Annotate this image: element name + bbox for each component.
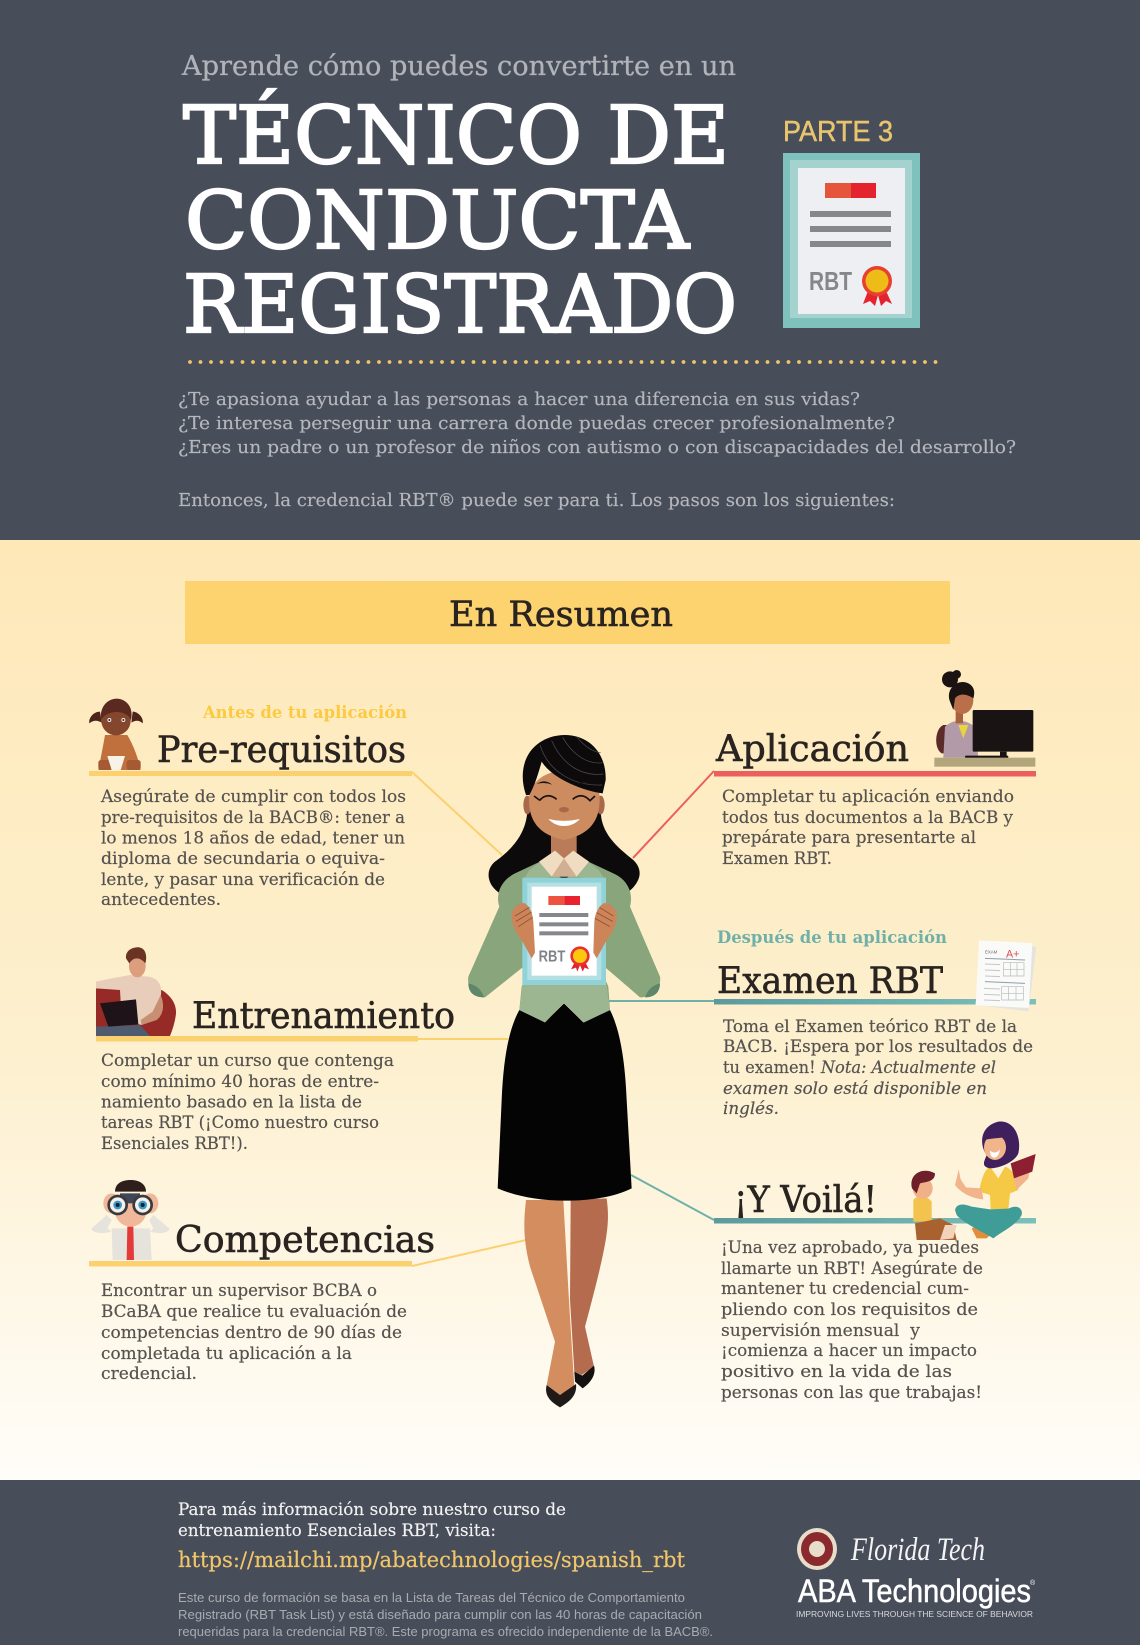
body text: inglés.	[723, 1099, 779, 1119]
body text: tu examen! Nota: Actualmente el	[723, 1058, 996, 1078]
body text: Toma el Examen teórico RBT de la	[723, 1017, 1017, 1037]
icon: baby	[89, 699, 143, 770]
heading: en resumen: En Resumen	[449, 595, 673, 635]
body text: Examen RBT.	[722, 849, 832, 869]
label: parte 3: PARTE 3	[783, 116, 893, 148]
title: CONDUCTA	[185, 174, 690, 267]
body text: examen solo está disponible en	[723, 1079, 987, 1099]
intro questions: ¿Te interesa perseguir una carrera donde puedas crecer profesionalmente?	[178, 413, 895, 434]
title: TÉCNICO DE	[183, 88, 729, 182]
title	[183, 88, 737, 351]
body text	[722, 787, 1014, 869]
cuffs	[468, 983, 484, 997]
legs	[524, 1200, 574, 1395]
icon: RBT certificate: RBT	[809, 266, 852, 296]
body text: namiento basado en la lista de	[101, 1092, 362, 1112]
body text: mantener tu credencial cum-	[721, 1279, 969, 1299]
intro line: Aprende cómo puedes convertirte en un	[181, 51, 736, 82]
panel: header	[0, 0, 1140, 540]
body text: supervisión mensual y	[721, 1321, 920, 1341]
hair back	[489, 810, 640, 893]
face	[523, 796, 531, 814]
body text: lo menos 18 años de edad, tener un	[101, 828, 405, 848]
call to action: Para más información sobre nuestro curso de	[178, 1500, 566, 1520]
skirt	[498, 1003, 632, 1201]
body text	[101, 1281, 407, 1384]
icon: exam papers	[976, 940, 1036, 1011]
body text: diploma de secundaria o equiva-	[101, 849, 385, 869]
sublabel: Antes de tu aplicación	[202, 703, 407, 723]
body text	[101, 1051, 394, 1154]
body text: pre-requisitos de la BACB®: tener a	[101, 808, 405, 828]
sublabel: Después de tu aplicación	[717, 928, 947, 948]
logo: aba technologies: ABA Technologies	[798, 1573, 1031, 1609]
body text: completada tu aplicación a la	[101, 1344, 352, 1364]
panel: footer	[0, 1480, 1140, 1645]
body text: ¡comienza a hacer un impacto	[721, 1341, 977, 1361]
illustration: woman holding certificate: RBT	[539, 949, 566, 966]
jacket	[468, 862, 660, 1022]
panel: summary background	[0, 540, 1140, 1480]
illustration: woman holding certificate	[468, 735, 660, 1407]
body text: competencias dentro de 90 días de	[101, 1323, 402, 1343]
connector lines	[412, 771, 714, 1266]
body text	[721, 1238, 983, 1403]
rule	[89, 1261, 412, 1266]
logo: aba technologies: ®	[1030, 1579, 1036, 1587]
body text: BACB. ¡Espera por los resultados de	[723, 1037, 1033, 1057]
facial features	[537, 781, 592, 785]
body text	[100, 787, 406, 910]
panel: pre-requisitos	[89, 699, 412, 910]
hair top	[523, 735, 606, 795]
body text: antecedentes.	[101, 890, 221, 910]
disclaimer: Registrado (RBT Task List) y está diseñado para cumplir con las 40 horas de capacitación	[178, 1608, 702, 1622]
boy	[913, 1196, 932, 1222]
body text: pliendo con los requisitos de	[721, 1300, 978, 1320]
intro questions: ¿Eres un padre o un profesor de niños con autismo o con discapacidades del desarrollo?	[178, 437, 1016, 458]
rule	[714, 1218, 1036, 1224]
call to action: entrenamiento Esenciales RBT, visita:	[178, 1521, 496, 1541]
disclaimer: requeridas para la credencial RBT®. Este programa es ofrecido independiente de la BACB®.	[178, 1625, 713, 1639]
logo: aba technologies: IMPROVING LIVES THROUGH THE SCIENCE OF BEHAVIOR	[796, 1609, 1033, 1619]
body text: Completar tu aplicación enviando	[722, 787, 1014, 807]
call to action	[178, 1500, 566, 1541]
logo: florida tech	[797, 1528, 985, 1570]
heading: Examen RBT	[717, 961, 943, 1002]
icon: man with binoculars	[92, 1180, 169, 1260]
rule	[96, 1036, 418, 1042]
panel: y voilá	[714, 1122, 1036, 1403]
body text: todos tus documentos a la BACB y	[722, 808, 1013, 828]
heading: Competencias	[175, 1220, 435, 1261]
body text: prepárate para presentarte al	[722, 828, 976, 848]
title: REGISTRADO	[183, 258, 737, 351]
panel: examen RBT	[714, 928, 1036, 1119]
body text: lente, y pasar una verificación de	[101, 870, 385, 890]
icon: exam papers: EXAM	[985, 949, 998, 954]
body text: personas con las que trabajas!	[721, 1383, 982, 1403]
panel: competencias	[89, 1180, 435, 1384]
disclaimer	[178, 1591, 713, 1639]
panel: entrenamiento	[96, 947, 455, 1154]
disclaimer: Este curso de formación se basa en la Lista de Tareas del Técnico de Comportamiento	[178, 1591, 685, 1605]
body text: ¡Una vez aprobado, ya puedes	[721, 1238, 979, 1258]
body text: Esenciales RBT!).	[101, 1134, 248, 1154]
logo: florida tech: Florida Tech	[850, 1532, 985, 1568]
intro questions	[178, 389, 1016, 511]
dotted divider	[190, 360, 938, 364]
icon: exam papers: A+	[1006, 948, 1019, 960]
rule	[714, 771, 1036, 776]
collar	[539, 851, 589, 877]
woman	[972, 1225, 998, 1238]
body text: llamarte un RBT! Asegúrate de	[721, 1259, 983, 1279]
heading: ¡Y Voilá!	[734, 1180, 877, 1221]
icon: man with laptop on sofa	[96, 947, 176, 1036]
neck	[551, 830, 577, 858]
rule	[89, 771, 412, 776]
body text: Asegúrate de cumplir con todos los	[100, 787, 406, 807]
body text: BCaBA que realice tu evaluación de	[101, 1302, 407, 1322]
hands	[512, 903, 535, 958]
body text: positivo en la vida de las	[721, 1362, 952, 1382]
intro questions: Entonces, la credencial RBT® puede ser para ti. Los pasos son los siguientes:	[178, 490, 895, 511]
held certificate	[522, 878, 606, 985]
icon: RBT certificate	[783, 153, 920, 328]
body text	[723, 1017, 1033, 1119]
body text: Completar un curso que contenga	[101, 1051, 394, 1071]
body text: tareas RBT (¡Como nuestro curso	[101, 1113, 379, 1133]
body text: Encontrar un supervisor BCBA o	[101, 1281, 377, 1301]
body text: como mínimo 40 horas de entre-	[101, 1072, 379, 1092]
heading: Aplicación	[715, 729, 909, 770]
body text: credencial.	[101, 1364, 197, 1384]
url: https://mailchi.mp/abatechnologies/spanish_rbt	[178, 1548, 686, 1572]
icon: woman at computer	[934, 670, 1035, 767]
intro questions: ¿Te apasiona ayudar a las personas a hacer una diferencia en sus vidas?	[178, 389, 860, 410]
shoes	[546, 1384, 576, 1407]
heading: Entrenamiento	[192, 996, 455, 1037]
panel: aplicación	[714, 670, 1036, 869]
icon: teacher and child reading	[911, 1122, 1036, 1240]
heading: Pre-requisitos	[157, 730, 406, 771]
rule	[714, 999, 1036, 1004]
heading: en resumen	[185, 581, 950, 644]
